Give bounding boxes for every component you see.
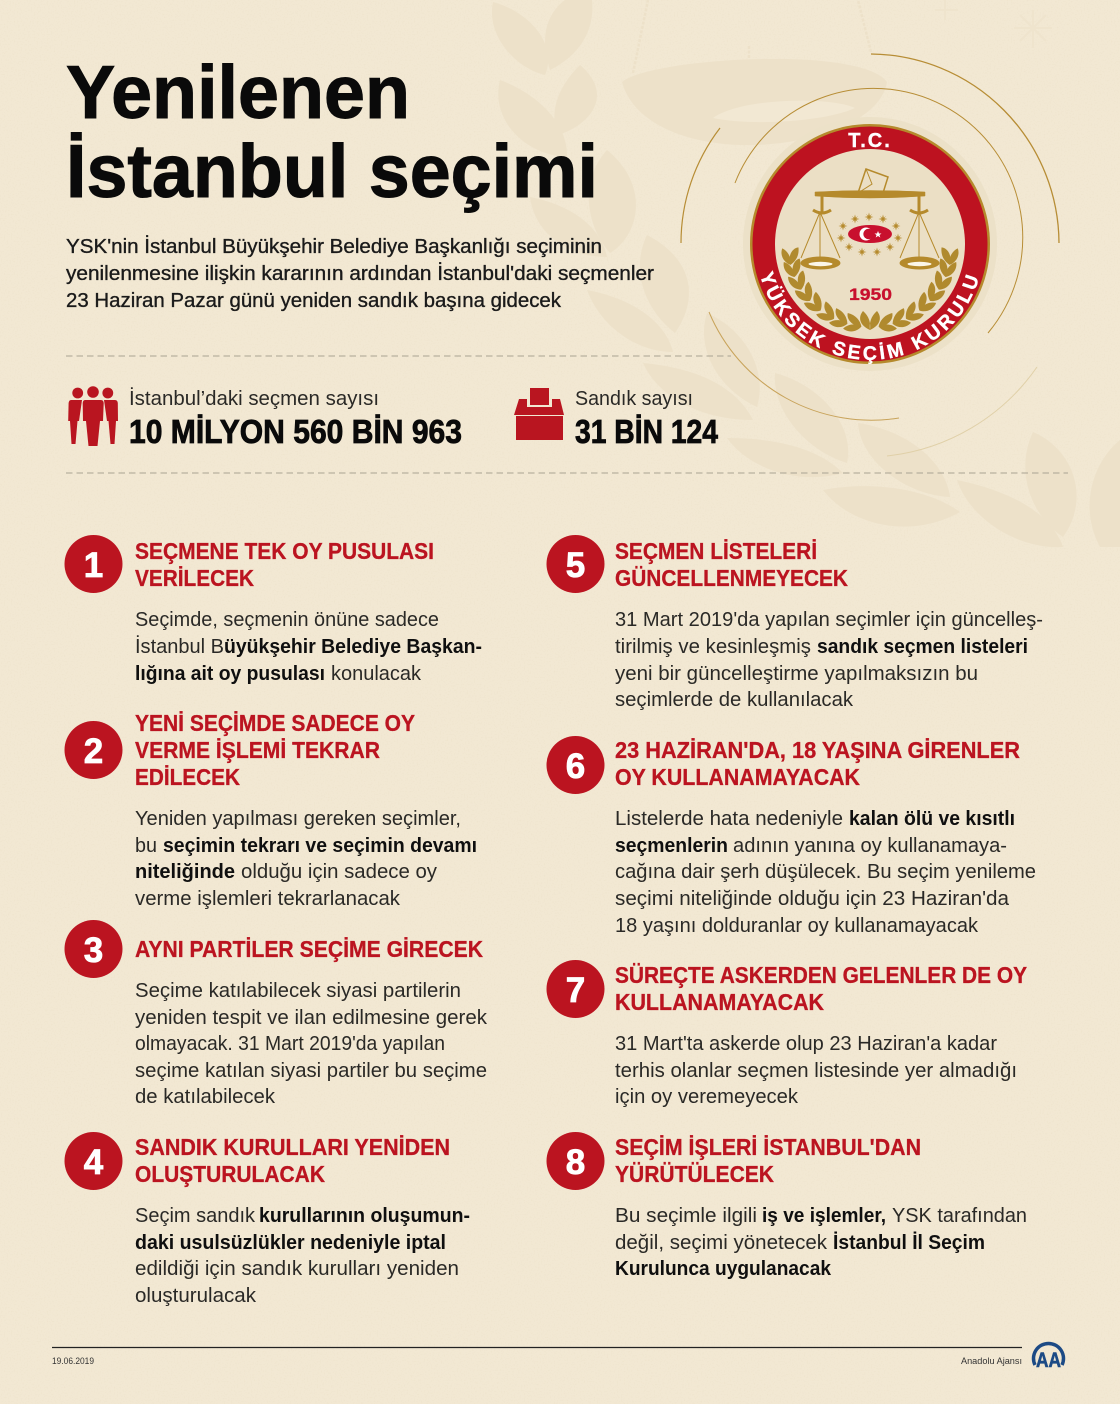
- item 2: 2: [84, 732, 103, 771]
- item 2: Yeniden yapılması gereken seçimler,: [135, 808, 461, 830]
- date: 19.06.2019: [52, 1356, 94, 1366]
- item 8: SEÇİM İŞLERİ İSTANBUL'DAN: [615, 1134, 921, 1160]
- item 6: [546, 736, 1036, 937]
- item 8: iş ve işlemler,: [762, 1205, 886, 1227]
- item 1: VERİLECEK: [135, 565, 254, 591]
- item 7: KULLANAMAYACAK: [615, 989, 824, 1015]
- intro text: YSK'nin İstanbul Büyükşehir Belediye Başkanlığı seçiminin: [66, 235, 602, 258]
- item 6: adının yanına oy kullanamaya-: [733, 835, 1007, 857]
- item 1: SEÇMENE TEK OY PUSULASI: [135, 538, 434, 564]
- item 1: İstanbul B: [135, 635, 224, 658]
- item 1: Seçimde, seçmenin önüne sadece: [135, 609, 439, 631]
- value: 31 BİN 124: [575, 413, 719, 450]
- item 5: 5: [566, 546, 585, 585]
- stat: voters: [68, 386, 462, 450]
- item 8: Kurulunca uygulanacak: [615, 1258, 832, 1280]
- item 8: İstanbul İl Seçim: [833, 1231, 985, 1254]
- emblem: YSK seal: [680, 53, 1060, 456]
- item 1: 1: [84, 546, 103, 585]
- title: Yenilenen: [66, 50, 410, 134]
- item 5: SEÇMEN LİSTELERİ: [615, 538, 817, 564]
- item 7: için oy veremeyecek: [615, 1086, 799, 1108]
- item 4: edildiği için sandık kurulları yeniden: [135, 1258, 459, 1280]
- source: Anadolu Ajansı: [961, 1356, 1022, 1366]
- item 2: olduğu için sadece oy: [241, 861, 437, 883]
- icon: AA logo: [1034, 1343, 1064, 1372]
- item 3: yeniden tespit ve ilan edilmesine gerek: [135, 1007, 488, 1029]
- item 3: de katılabilecek: [135, 1086, 276, 1108]
- item 2: seçimin tekrarı ve seçimin devamı: [163, 835, 477, 857]
- item 5: GÜNCELLENMEYECEK: [615, 565, 848, 591]
- item 3: olmayacak. 31 Mart 2019'da yapılan: [135, 1033, 445, 1055]
- item 8: YÜRÜTÜLECEK: [615, 1161, 774, 1187]
- value: 10 MİLYON 560 BİN 963: [129, 413, 462, 450]
- item 2: YENİ SEÇİMDE SADECE OY: [135, 710, 415, 736]
- item 5: sandık seçmen listeleri: [817, 636, 1028, 658]
- title: [66, 50, 598, 213]
- item 3: 3: [84, 931, 103, 970]
- icon: AA logo: AA: [1036, 1349, 1061, 1372]
- item 2: [64, 710, 477, 910]
- item 2: verme işlemleri tekrarlanacak: [135, 888, 401, 910]
- item 6: seçimi niteliğinde olduğu için 23 Haziran'da: [615, 888, 1010, 910]
- item 6: seçmenlerin: [615, 835, 728, 857]
- item 6: 18 yaşını dolduranlar oy kullanamayacak: [615, 915, 979, 937]
- seal text top: T.C.: [848, 130, 892, 152]
- scales: [801, 169, 939, 258]
- seal text bottom: YÜKSEK SEÇİM KURULU: [761, 270, 978, 364]
- item 1: [64, 535, 482, 685]
- item 4: kurullarının oluşumun-: [259, 1205, 470, 1227]
- intro text: yenilenmesine ilişkin kararının ardından İstanbul'daki seçmenler: [66, 262, 654, 285]
- item 1: üyükşehir Belediye Başkan-: [224, 636, 482, 658]
- item 5: [546, 535, 1043, 711]
- title: İstanbul seçimi: [66, 129, 598, 213]
- footer: [52, 1343, 1064, 1372]
- item 8: YSK tarafından: [892, 1205, 1027, 1227]
- label: İstanbul’daki seçmen sayısı: [129, 387, 379, 410]
- item 6: 23 HAZİRAN'DA, 18 YAŞINA GİRENLER: [615, 737, 1020, 763]
- item 8: değil, seçimi yönetecek: [615, 1232, 828, 1254]
- label: Sandık sayısı: [575, 388, 693, 410]
- laurel wreath: [780, 244, 960, 333]
- item 4: SANDIK KURULLARI YENİDEN: [135, 1134, 450, 1160]
- item 7: [546, 960, 1027, 1108]
- item 5: seçimlerde de kullanılacak: [615, 689, 854, 711]
- item 3: seçime katılan siyasi partiler bu seçime: [135, 1060, 487, 1082]
- intro text: 23 Haziran Pazar günü yeniden sandık başına gidecek: [66, 290, 562, 312]
- item 8: 8: [566, 1143, 585, 1182]
- item 1: konulacak: [331, 663, 422, 685]
- item 3: Seçime katılabilecek siyasi partilerin: [135, 980, 461, 1002]
- item 7: 31 Mart'ta askerde olup 23 Haziran'a kadar: [615, 1033, 997, 1055]
- stars and flag: [836, 212, 902, 256]
- decorative arcs around seal: [681, 54, 1059, 456]
- item 4: 4: [84, 1143, 104, 1182]
- item 6: kalan ölü ve kısıtlı: [849, 808, 1015, 830]
- item 8: Bu seçimle ilgili: [615, 1205, 757, 1227]
- icon: people: [68, 386, 118, 446]
- seal year: 1950: [849, 286, 892, 304]
- item 4: oluşturulacak: [135, 1285, 257, 1307]
- item 2: bu: [135, 835, 157, 857]
- item 4: [64, 1132, 470, 1307]
- icon: ballot box: [514, 388, 564, 440]
- item 2: niteliğinde: [135, 861, 235, 883]
- item 8: [546, 1132, 1027, 1280]
- item 7: terhis olanlar seçmen listesinde yer almadığı: [615, 1060, 1017, 1082]
- item 4: Seçim sandık: [135, 1205, 256, 1227]
- item 4: daki usulsüzlükler nedeniyle iptal: [135, 1232, 446, 1254]
- item 5: tirilmiş ve kesinleşmiş: [615, 636, 811, 658]
- background watermark: scale and laurel: [492, 0, 1120, 547]
- item 4: OLUŞTURULACAK: [135, 1161, 325, 1187]
- item 1: lığına ait oy pusulası: [135, 663, 325, 685]
- item 3: [64, 920, 488, 1108]
- intro text: [66, 235, 654, 312]
- item 5: yeni bir güncelleştirme yapılmaksızın bu: [615, 663, 978, 685]
- stat: ballot boxes: [514, 388, 719, 450]
- item 5: 31 Mart 2019'da yapılan seçimler için güncelleş-: [615, 609, 1043, 631]
- item 2: EDİLECEK: [135, 764, 240, 790]
- item 6: cağına dair şerh düşülecek. Bu seçim yenileme: [615, 861, 1036, 883]
- item 2: VERME İŞLEMİ TEKRAR: [135, 737, 380, 763]
- item 7: 7: [566, 971, 585, 1010]
- item 6: OY KULLANAMAYACAK: [615, 764, 860, 790]
- item 6: 6: [566, 747, 585, 786]
- item 3: AYNI PARTİLER SEÇİME GİRECEK: [135, 936, 483, 962]
- item 7: SÜREÇTE ASKERDEN GELENLER DE OY: [615, 962, 1027, 988]
- item 6: Listelerde hata nedeniyle: [615, 808, 843, 830]
